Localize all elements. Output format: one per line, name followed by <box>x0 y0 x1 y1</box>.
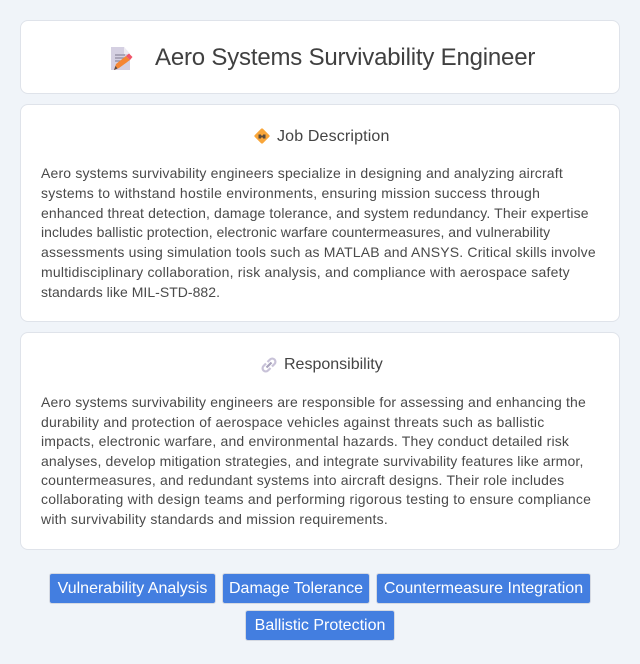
tag: vulnerability analysis <box>50 574 215 603</box>
tag: damage tolerance <box>223 574 369 603</box>
text block: job description: assessments using simulation tools such as MATLAB and ANSYS. Critical skills involve <box>41 244 596 260</box>
icon: chain link <box>262 358 276 372</box>
text block: job description: standards like MIL-STD-882. <box>41 284 220 300</box>
text block: job description: systems to withstand hostile environments, ensuring mission success through <box>41 185 540 201</box>
text block: job description: multidisciplinary collaboration, risk analysis, and compliance with aerospace safety <box>41 264 570 280</box>
text block: responsibility: analyses, develop mitigation strategies, and integrate survivability features like armor, <box>41 453 584 469</box>
title: Aero Systems Survivability Engineer <box>155 44 535 71</box>
text block: responsibility: countermeasures, and redundant systems into aircraft designs. Their role includes <box>41 472 564 488</box>
text block: responsibility: collaborating with design teams and performing rigorous testing to ensure compliance <box>41 491 591 507</box>
text block: job description: includes ballistic protection, electronic warfare countermeasures, and vulnerability <box>41 224 550 240</box>
tag: ballistic protection <box>246 611 394 640</box>
text block: job description: enhanced threat detection, damage tolerance, and system redundancy. Their expertise <box>41 205 589 221</box>
tag: vulnerability analysis: Vulnerability Analysis <box>58 580 207 597</box>
heading: job description: Job Description <box>277 128 390 145</box>
text block: responsibility: durability and protection of aerospace vehicles against threats such as ballistic <box>41 414 544 430</box>
text block: responsibility <box>41 394 591 527</box>
icon: document with pencil <box>111 47 132 70</box>
tag: damage tolerance: Damage Tolerance <box>229 580 363 597</box>
panel: responsibility <box>20 332 620 550</box>
icon: job description diamond <box>254 128 270 144</box>
text block: responsibility: impacts, electronic warfare, and environmental hazards. They conduct detailed risk <box>41 433 569 449</box>
tag: countermeasure integration: Countermeasure Integration <box>384 580 583 597</box>
text block: job description <box>41 165 596 300</box>
text block: responsibility: Aero systems survivability engineers are responsible for assessing and enhancing the <box>41 394 586 410</box>
text block: responsibility: with survivability standards and mission requirements. <box>41 511 388 527</box>
tag: ballistic protection: Ballistic Protection <box>255 617 385 634</box>
panel: job description <box>20 104 620 322</box>
header card <box>20 20 620 94</box>
tag: countermeasure integration <box>377 574 590 603</box>
heading: responsibility: Responsibility <box>284 356 383 373</box>
text block: job description: Aero systems survivability engineers specialize in designing and analyzing aircraft <box>41 165 563 181</box>
